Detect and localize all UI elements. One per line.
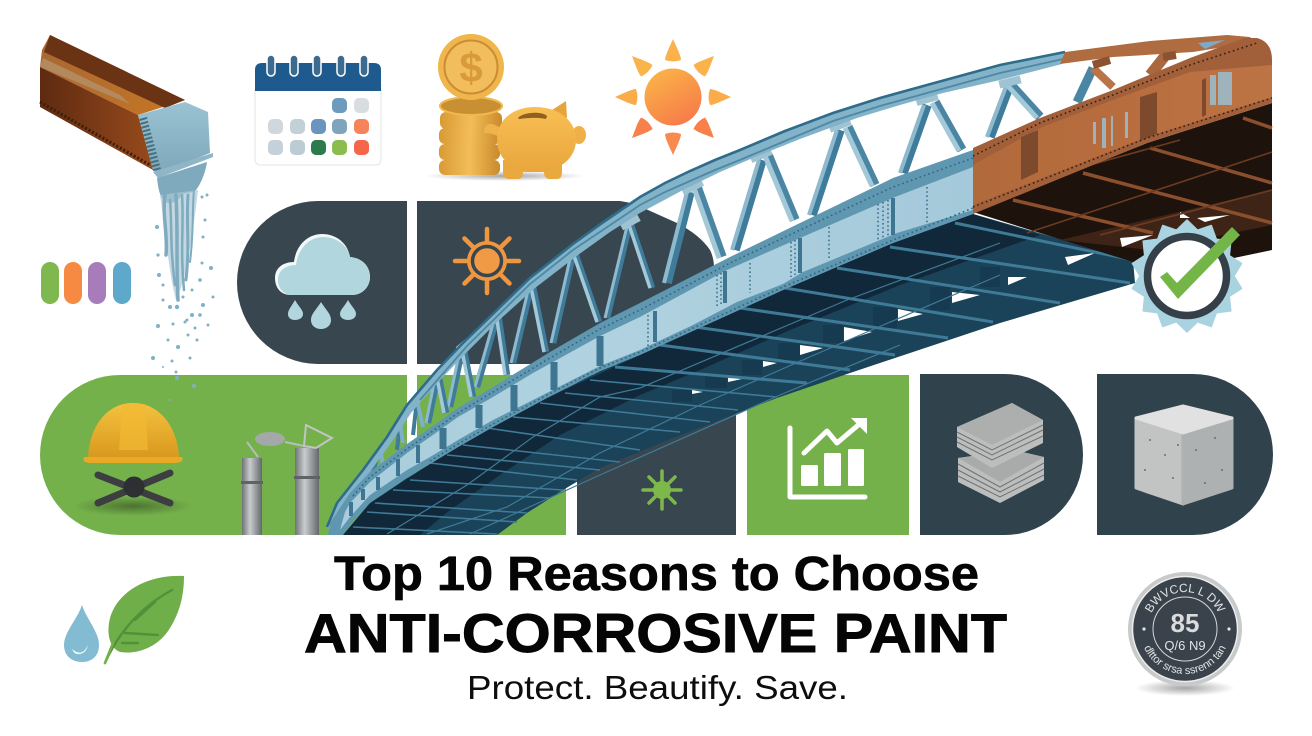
icon: certification seal: BWVCCL L DW bbox=[1144, 584, 1226, 612]
longitudinal ties bbox=[387, 243, 1000, 534]
icon: certification seal: 85 bbox=[1171, 608, 1199, 638]
icon: colour swatch pills bbox=[41, 262, 131, 304]
tagline: Protect. Beautify. Save. bbox=[467, 669, 848, 706]
panel: rain bbox=[237, 201, 407, 364]
top chord rust bbox=[1060, 35, 1255, 65]
blue plate girder bbox=[328, 150, 973, 535]
panel: green lower square bbox=[417, 375, 566, 535]
rust rivet plates bbox=[1021, 78, 1206, 180]
transverse beams bbox=[353, 223, 1133, 534]
bridge underside blue bbox=[343, 214, 1135, 535]
heading line one: Top 10 Reasons to Choose bbox=[334, 548, 979, 601]
icon: concrete cube bbox=[1136, 406, 1232, 504]
panel: concrete sheets bbox=[920, 374, 1083, 535]
icon: certification seal: Q/6 N9 bbox=[1164, 638, 1206, 653]
panel: safety green pill bbox=[40, 375, 407, 535]
icon: orange sun with rays bbox=[455, 229, 519, 293]
deck blocks bbox=[672, 267, 1000, 402]
panel: sun heat bbox=[417, 201, 714, 364]
gaps between deck beams bbox=[692, 253, 1095, 394]
icon: quality check badge bbox=[1132, 220, 1242, 332]
paint droplets bbox=[151, 194, 214, 401]
icon: rusty beam being painted bbox=[40, 35, 214, 401]
truss joint plates bbox=[456, 75, 1022, 353]
bridge underside rust bbox=[973, 103, 1272, 262]
icon: steel pipes with inspection tool bbox=[241, 425, 332, 535]
top chord blue bbox=[327, 52, 1065, 530]
dark rivet ribs bbox=[655, 198, 893, 342]
icon: certification seal: dlttor srsa ssrenn tan bbox=[1144, 646, 1226, 674]
vertical rivet lines bbox=[648, 187, 927, 347]
icon: water drop and leaf bbox=[64, 576, 184, 663]
icon: green star burst bbox=[643, 471, 681, 509]
panel: small star bbox=[577, 375, 736, 535]
rusted plate girder bbox=[973, 38, 1272, 214]
icon: calendar bbox=[255, 59, 381, 165]
icon: certification seal bbox=[1128, 572, 1242, 695]
bridge illustration bbox=[327, 35, 1272, 535]
panel: concrete cube bbox=[1097, 374, 1273, 535]
corrosion streaks showing blue paint bbox=[1093, 72, 1232, 148]
paint strands bbox=[160, 190, 198, 300]
icon: stacked sheets bbox=[957, 403, 1044, 503]
icon: coin stack and piggy bank bbox=[425, 34, 586, 181]
icon: hard hat and cross wrench bbox=[73, 403, 193, 516]
truss diagonals bbox=[340, 56, 1165, 515]
panel: growth chart bbox=[747, 375, 909, 535]
icon: bar chart with rising arrow bbox=[790, 418, 867, 497]
icon: rain cloud bbox=[275, 234, 370, 329]
icon: orange sun bbox=[615, 39, 731, 155]
dollar sign on coin: $ bbox=[459, 44, 483, 91]
heading line two: ANTI-CORROSIVE PAINT bbox=[304, 602, 1007, 664]
